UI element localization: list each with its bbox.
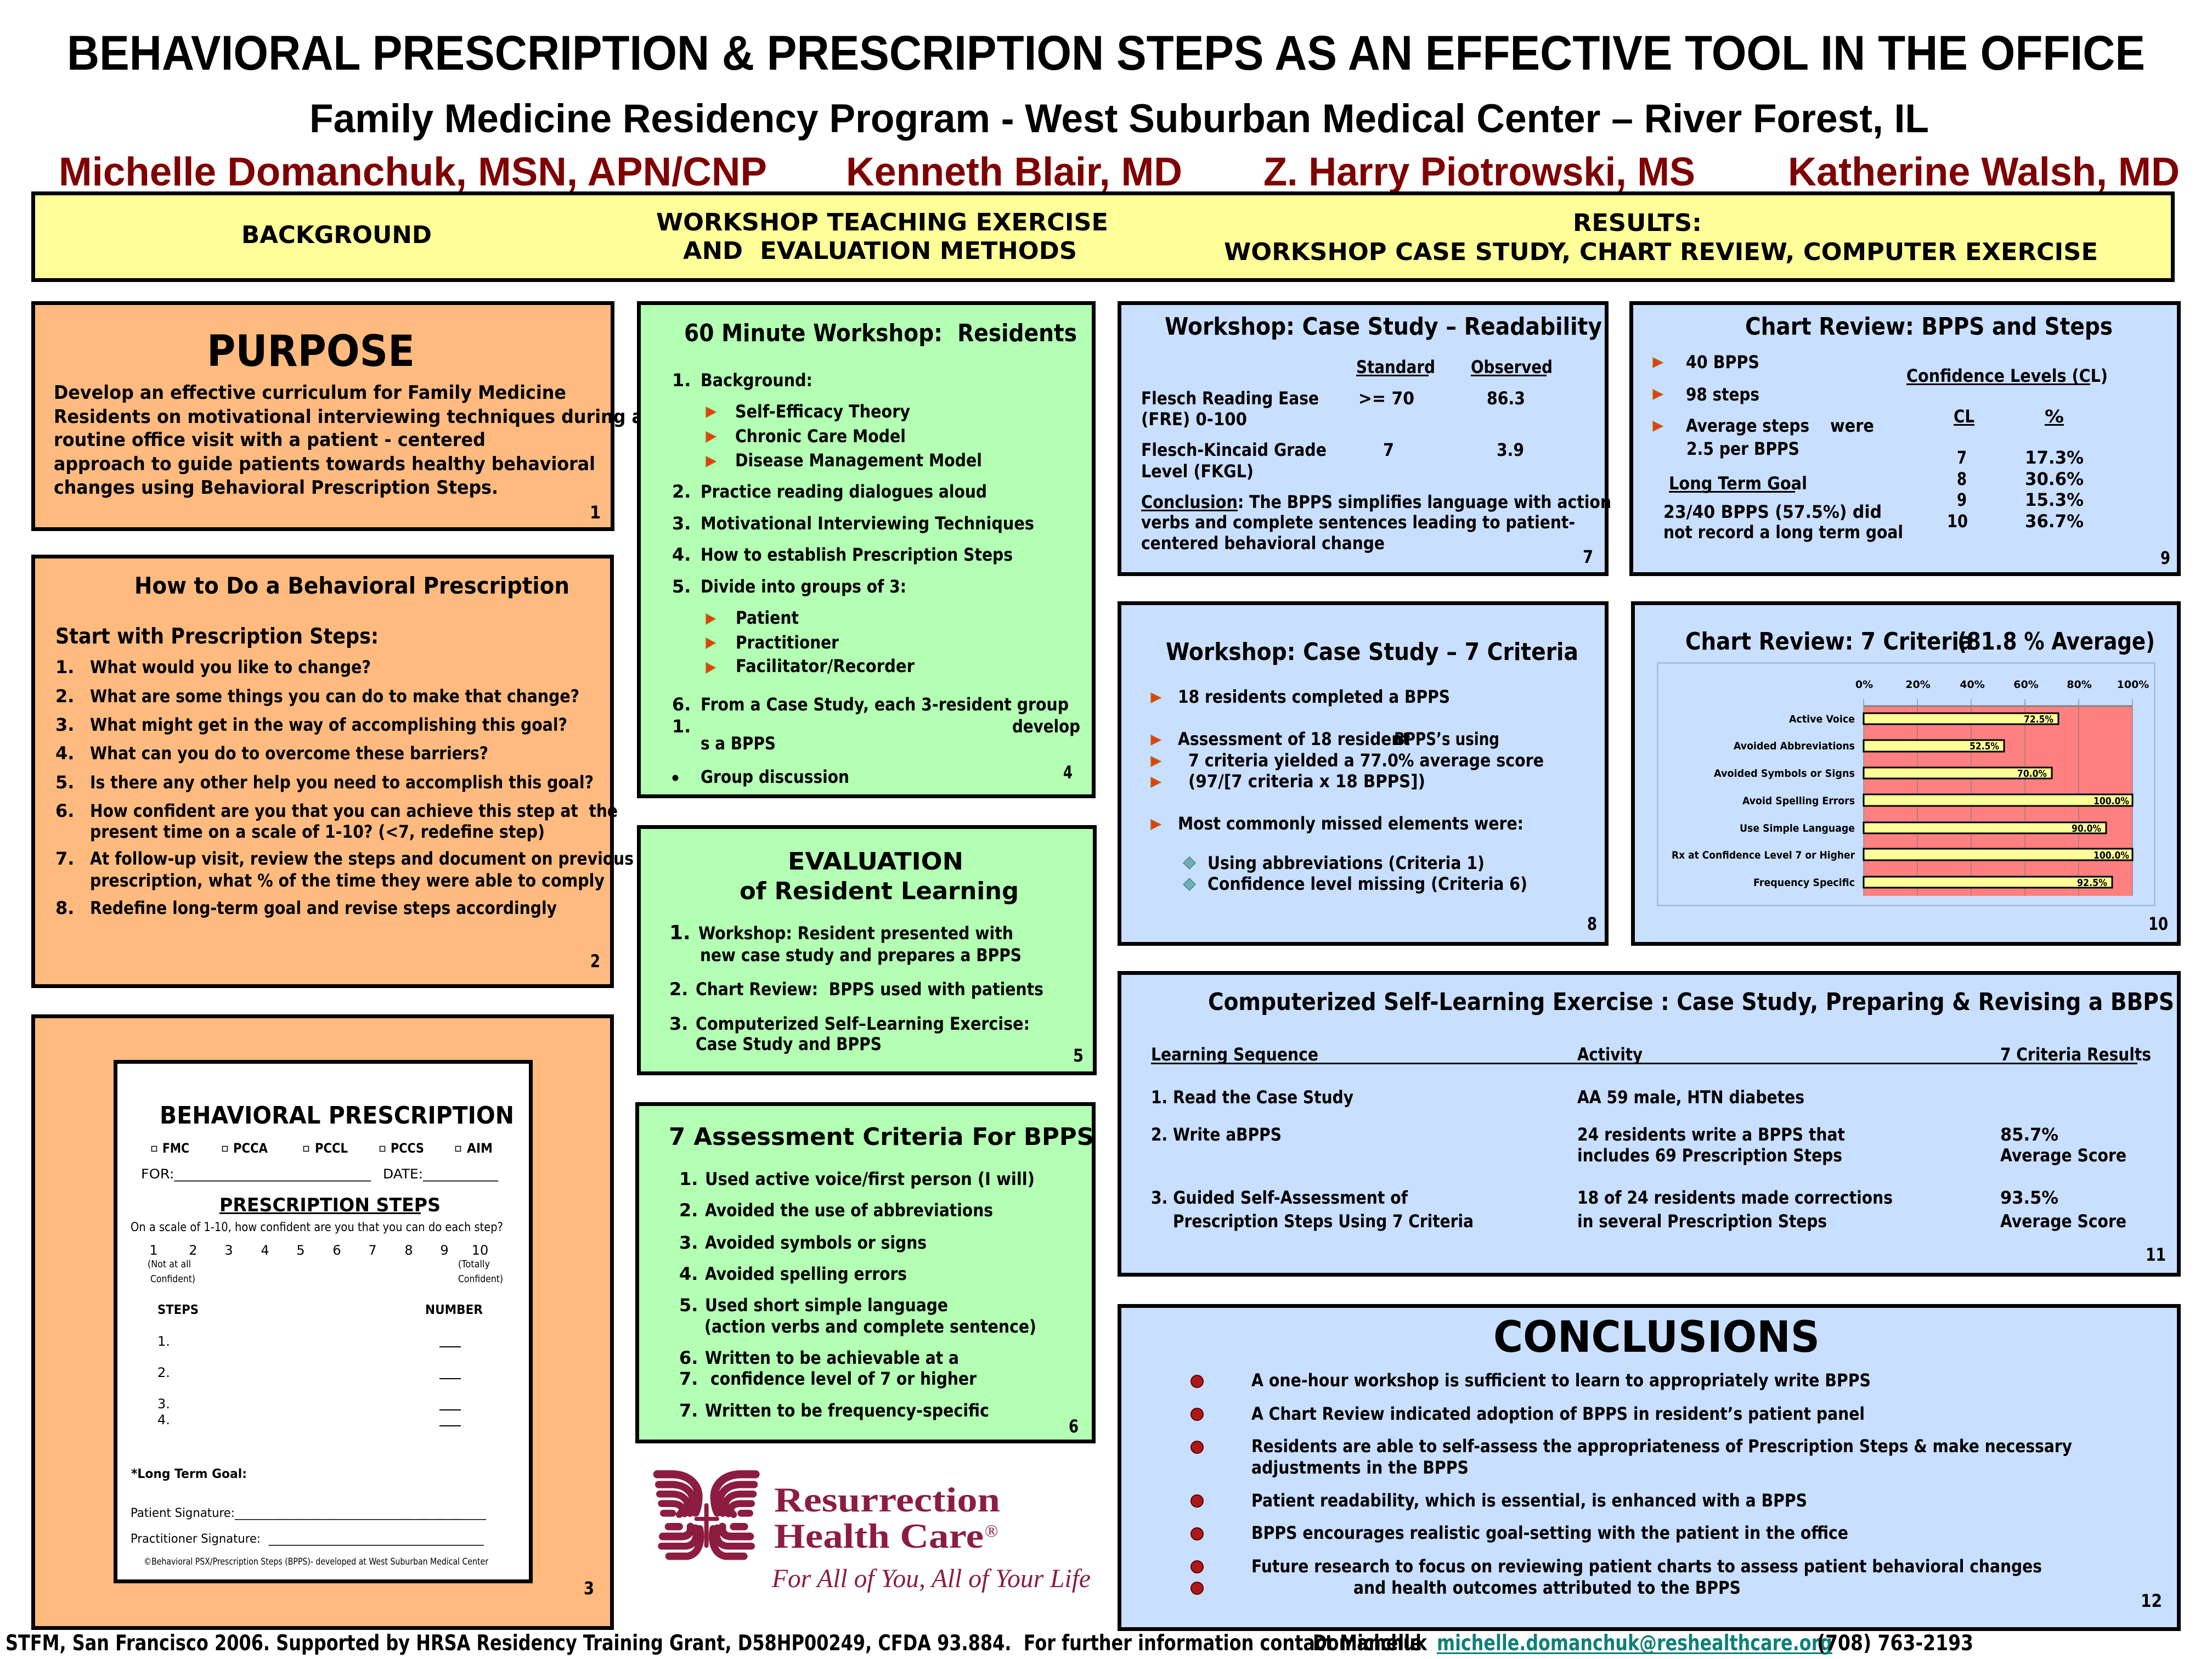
form sheet: 6	[332, 1243, 341, 1258]
criteria list	[679, 1169, 1036, 1421]
panel: case study 7 criteria	[1119, 603, 1606, 944]
evaluation list: Chart Review: BPPS used with patients	[696, 979, 1043, 1000]
readability table: Flesch Reading Ease	[1141, 388, 1319, 409]
findings list: (97/[7 criteria x 18 BPPS])	[1188, 771, 1425, 792]
form sheet: Patient Signature:	[131, 1506, 235, 1520]
form sheet: NUMBER	[425, 1303, 483, 1317]
form sheet: PCCS	[391, 1141, 424, 1156]
form sheet: ______________________________	[268, 1532, 484, 1546]
section banner	[33, 193, 2172, 280]
readability table: >= 70	[1358, 388, 1414, 409]
heading: evaluation	[740, 848, 1019, 905]
heading: chart review 7 criteria	[1685, 628, 2155, 656]
findings list: 7 criteria yielded a 77.0% average score	[1188, 750, 1544, 771]
bar chart: Frequency Specific	[1753, 877, 1855, 889]
bullet list	[1653, 352, 1874, 459]
criteria list: (action verbs and complete sentence)	[704, 1316, 1036, 1337]
authors: Z. Harry Piotrowski, MS	[1263, 150, 1695, 194]
conclusion text: : The BPPS simplifies language with action	[1238, 492, 1611, 512]
heading: purpose: PURPOSE	[207, 327, 415, 376]
form sheet: 1.	[157, 1334, 170, 1349]
authors	[59, 150, 2180, 194]
logo: Resurrection Health Care: ®	[985, 1521, 998, 1541]
bar chart: Avoided Abbreviations	[1734, 740, 1855, 752]
heading: conclusions: CONCLUSIONS	[1493, 1313, 1820, 1362]
long term goal	[1663, 473, 1903, 543]
criteria list: Used active voice/first person (I will)	[705, 1169, 1035, 1189]
criteria list: 4.	[679, 1263, 698, 1284]
evaluation list: 2.	[669, 979, 688, 1000]
self-learning table: 3. Guided Self-Assessment of	[1151, 1187, 1408, 1208]
findings list: Assessment of 18 resident	[1178, 729, 1410, 749]
form sheet: FOR:____________________________	[141, 1166, 371, 1182]
workshop list	[672, 370, 1080, 787]
form sheet: PRESCRIPTION STEPS	[219, 1194, 441, 1216]
section banner: AND EVALUATION METHODS	[683, 237, 1077, 265]
numbered step list: At follow-up visit, review the steps and document on previous	[90, 848, 634, 869]
panel: chart review 7 criteria	[1633, 603, 2179, 944]
bar chart	[1658, 663, 2155, 905]
confidence levels table: 30.6%	[2025, 469, 2084, 489]
conclusions list: A Chart Review indicated adoption of BPPS in resident’s patient panel	[1251, 1403, 1865, 1424]
long term goal: Long Term Goal	[1669, 473, 1807, 494]
logo: Resurrection Health Care: For All of You, All of Your Life	[771, 1564, 1091, 1593]
numbered step list: 3.	[55, 714, 74, 735]
self-learning table: AA 59 male, HTN diabetes	[1577, 1087, 1804, 1108]
heading: 7 criteria: Workshop: Case Study – 7 Criteria	[1166, 638, 1578, 666]
numbered step list: 5.	[55, 772, 74, 793]
numbered step list: 6.	[55, 800, 74, 821]
self-learning table: 2. Write aBPPS	[1151, 1124, 1282, 1145]
form sheet: BEHAVIORAL PRESCRIPTION	[160, 1102, 514, 1130]
self-learning table: 93.5%	[2000, 1187, 2058, 1208]
workshop list: How to establish Prescription Steps	[701, 544, 1013, 565]
conclusion text: verbs and complete sentences leading to patient-	[1141, 512, 1575, 533]
conclusions list: Residents are able to self-assess the appropriateness of Prescription Steps & make necessary	[1251, 1436, 2072, 1457]
bullet list: Average steps	[1686, 415, 1809, 436]
workshop list: 4.	[672, 544, 691, 565]
workshop list: Practitioner	[736, 632, 839, 653]
form sheet: 9	[440, 1243, 449, 1258]
footer: Domanchuk	[1313, 1631, 1427, 1656]
confidence levels table: 17.3%	[2025, 447, 2084, 468]
numbered step list	[55, 657, 634, 918]
confidence levels table: 8	[1957, 469, 1967, 489]
bar chart: 52.5%	[1970, 741, 1999, 752]
numbered step list: 2.	[55, 686, 74, 707]
evaluation list: 3.	[669, 1013, 688, 1034]
authors: Michelle Domanchuk, MSN, APN/CNP	[59, 150, 767, 194]
form sheet: Confident)	[150, 1273, 195, 1285]
conclusion text	[1141, 492, 1611, 554]
form sheet: *Long Term Goal:	[131, 1467, 247, 1481]
workshop list: 3.	[672, 513, 691, 534]
purpose text: changes using Behavioral Prescription Steps.	[54, 477, 498, 499]
evaluation list: Case Study and BPPS	[696, 1034, 882, 1054]
readability table: Level (FKGL)	[1141, 461, 1254, 482]
form sheet: DATE:___________	[383, 1166, 499, 1182]
workshop list: Motivational Interviewing Techniques	[701, 513, 1034, 534]
form sheet: ______________________________	[234, 1506, 487, 1520]
panel: case study 7 criteria: 8	[1587, 913, 1597, 934]
readability table: Flesch-Kincaid Grade	[1141, 439, 1327, 460]
authors: Kenneth Blair, MD	[846, 150, 1182, 194]
section banner: BACKGROUND	[241, 221, 432, 249]
numbered step list: How confident are you that you can achieve this step at the	[90, 800, 618, 821]
bar chart: 80%	[2067, 679, 2092, 691]
readability table: 3.9	[1497, 439, 1524, 460]
criteria list: Avoided spelling errors	[705, 1263, 907, 1284]
readability table: 86.3	[1487, 388, 1525, 409]
criteria list: 3.	[679, 1232, 698, 1253]
numbered step list: 1.	[55, 657, 74, 678]
workshop list: Divide into groups of 3:	[701, 576, 906, 597]
self-learning table: 18 of 24 residents made corrections	[1577, 1187, 1893, 1208]
self-learning table	[1151, 1044, 2151, 1232]
numbered step list: 7.	[55, 848, 74, 869]
form sheet: Confident)	[458, 1273, 503, 1285]
panel: chart review 7 criteria: 10	[2148, 913, 2168, 934]
form sheet: Practitioner Signature:	[131, 1532, 261, 1546]
confidence levels table: %	[2045, 406, 2064, 427]
confidence levels table	[1906, 365, 2108, 532]
form sheet: 10	[472, 1243, 488, 1258]
conclusions list: adjustments in the BPPS	[1251, 1457, 1469, 1478]
self-learning table: 24 residents write a BPPS that	[1577, 1124, 1845, 1145]
criteria list: Avoided the use of abbreviations	[705, 1200, 993, 1221]
evaluation list: 1.	[669, 922, 691, 944]
bar chart: Use Simple Language	[1740, 822, 1855, 834]
confidence levels table: CL	[1954, 406, 1974, 427]
conclusions list: Patient readability, which is essential, is enhanced with a BPPS	[1251, 1490, 1807, 1511]
findings list: Most commonly missed elements were:	[1178, 813, 1523, 834]
panel: evaluation of resident learning: 5	[1073, 1045, 1084, 1066]
workshop list: Chronic Care Model	[735, 426, 906, 447]
findings list	[1151, 686, 1544, 894]
evaluation list: Workshop: Resident presented with	[698, 923, 1013, 944]
panel: prescription form: 3	[584, 1578, 594, 1599]
bar chart: Avoided Symbols or Signs	[1714, 768, 1855, 780]
bar chart: 90.0%	[2072, 823, 2101, 834]
panel: 7 assessment criteria: 6	[1069, 1416, 1079, 1437]
panel: case study readability: 7	[1583, 546, 1593, 567]
bar chart: 70.0%	[2017, 768, 2047, 780]
self-learning table: in several Prescription Steps	[1577, 1211, 1827, 1232]
conclusions list: BPPS encourages realistic goal-setting with the patient in the office	[1251, 1522, 1848, 1543]
conclusion text: centered behavioral change	[1141, 533, 1385, 554]
self-learning table: Average Score	[2000, 1211, 2126, 1232]
numbered step list: What would you like to change?	[90, 657, 371, 678]
criteria list: 6.	[679, 1347, 698, 1368]
long term goal: 23/40 BPPS (57.5%) did	[1663, 501, 1882, 522]
bar chart: 100%	[2117, 679, 2149, 691]
panel: 7 assessment criteria	[637, 1104, 1094, 1442]
form sheet: (Not at all	[148, 1259, 191, 1270]
panel: chart review BPPS and steps	[1632, 303, 2179, 574]
self-learning table: Average Score	[2000, 1145, 2126, 1166]
section banner: RESULTS:	[1573, 209, 1702, 237]
form sheet: On a scale of 1-10, how confident are you that you can do each step?	[131, 1221, 503, 1234]
form sheet: 7	[368, 1243, 377, 1258]
workshop list: 1.	[672, 716, 691, 737]
self-learning table: 1. Read the Case Study	[1151, 1087, 1353, 1108]
bar chart: 72.5%	[2024, 714, 2053, 725]
heading: workshop: 60 Minute Workshop: Residents	[684, 319, 1077, 347]
bullet list: 2.5 per BPPS	[1686, 438, 1799, 459]
panel: evaluation of resident learning	[639, 827, 1095, 1073]
readability table: 7	[1383, 439, 1394, 460]
workshop list: 5.	[672, 576, 691, 597]
evaluation list: new case study and prepares a BPPS	[700, 945, 1022, 966]
criteria list: confidence level of 7 or higher	[710, 1368, 977, 1389]
numbered step list: What might get in the way of accomplishing this goal?	[90, 714, 567, 735]
heading: chart review 7 criteria: (81.8 % Average)	[1957, 628, 2155, 656]
workshop list: Background:	[701, 370, 812, 391]
form sheet: 3.	[157, 1396, 170, 1412]
bar chart: 0%	[1855, 679, 1873, 691]
criteria list: 5.	[679, 1295, 698, 1316]
purpose text: approach to guide patients towards healthy behavioral	[54, 453, 595, 475]
authors: Katherine Walsh, MD	[1788, 150, 2180, 194]
heading: chart review: Chart Review: BPPS and Steps	[1745, 313, 2113, 341]
workshop list: Disease Management Model	[735, 450, 982, 471]
logo: Resurrection Health Care	[657, 1474, 1091, 1593]
panel: prescription form	[33, 1016, 612, 1628]
conclusions list: A one-hour workshop is sufficient to learn to appropriately write BPPS	[1251, 1370, 1871, 1391]
long term goal: not record a long term goal	[1663, 522, 1903, 543]
heading: chart review 7 criteria: Chart Review: 7 Criteria	[1685, 628, 1973, 656]
form sheet: FMC	[162, 1141, 189, 1156]
workshop list: develop	[1012, 716, 1080, 737]
numbered step list: 4.	[55, 743, 74, 764]
heading: how to: How to Do a Behavioral Prescription	[134, 572, 569, 599]
form sheet: 1	[149, 1243, 158, 1258]
purpose text: Develop an effective curriculum for Family Medicine	[54, 382, 566, 404]
criteria list: 2.	[679, 1200, 698, 1221]
icon: logo emblem	[657, 1474, 755, 1556]
panel: how to do a behavioral prescription	[33, 556, 634, 986]
criteria list: Written to be frequency-specific	[705, 1400, 989, 1421]
confidence levels table: 10	[1947, 511, 1968, 532]
numbered step list: Redefine long-term goal and revise steps accordingly	[90, 898, 557, 918]
self-learning table: 7 Criteria Results	[2000, 1044, 2151, 1065]
panel: conclusions: 12	[2141, 1590, 2162, 1611]
self-learning table: includes 69 Prescription Steps	[1577, 1145, 1842, 1166]
conclusions list	[1191, 1370, 2072, 1598]
conclusions list: Future research to focus on reviewing patient charts to assess patient behavioral changes	[1251, 1556, 2042, 1577]
panel: 60 minute workshop: 4	[1063, 762, 1073, 783]
form sheet: 4.	[157, 1412, 170, 1427]
conclusions list: and health outcomes attributed to the BPPS	[1353, 1577, 1741, 1598]
form sheet: ©Behavioral PSX/Prescription Steps (BPPS)- developed at West Suburban Medical Center	[144, 1556, 488, 1567]
findings list: 18 residents completed a BPPS	[1178, 686, 1450, 707]
bar chart: 60%	[2013, 679, 2039, 691]
bar chart: 20%	[1905, 679, 1931, 691]
bar chart: Avoid Spelling Errors	[1742, 795, 1855, 807]
subheading: start with steps: Start with Prescription Steps:	[55, 624, 379, 649]
panel: computerized self-learning exercise: 11	[2146, 1244, 2166, 1265]
readability table: Observed	[1471, 357, 1553, 377]
form sheet: 5	[296, 1243, 305, 1258]
confidence levels table: 15.3%	[2025, 489, 2084, 510]
form sheet: 2	[189, 1243, 198, 1258]
readability table: Standard	[1356, 357, 1435, 377]
criteria list: Used short simple language	[705, 1295, 948, 1316]
purpose text	[54, 382, 644, 499]
purpose text: Residents on motivational interviewing techniques during a	[54, 406, 644, 428]
workshop list: s a BPPS	[701, 733, 776, 754]
criteria list: 7.	[679, 1368, 698, 1389]
bullet list: 40 BPPS	[1686, 352, 1759, 373]
workshop list: 1.	[672, 370, 691, 391]
bar chart: Rx at Confidence Level 7 or Higher	[1672, 849, 1855, 861]
criteria list: Written to be achievable at a	[705, 1347, 959, 1368]
workshop list: From a Case Study, each 3-resident group	[701, 694, 1069, 715]
bar chart: 40%	[1960, 679, 1985, 691]
workshop list: Practice reading dialogues aloud	[701, 481, 987, 502]
confidence levels table: 7	[1957, 447, 1967, 468]
form sheet: 2.	[157, 1365, 170, 1380]
bullet list: were	[1830, 415, 1874, 436]
panel: 60 minute workshop	[639, 303, 1094, 797]
heading: evaluation: of Resident Learning	[740, 877, 1019, 905]
subtitle: Family Medicine Residency Program - West Suburban Medical Center – River Forest, IL	[309, 97, 1929, 141]
heading: readability: Workshop: Case Study – Readability	[1165, 313, 1602, 341]
panel: chart review BPPS and steps: 9	[2160, 548, 2170, 568]
footer: STFM, San Francisco 2006. Supported by HRSA Residency Training Grant, D58HP00249, CFDA 93.884. For further information contact Michelle	[5, 1631, 1422, 1656]
bar chart: Active Voice	[1789, 713, 1855, 725]
confidence levels table: 36.7%	[2025, 511, 2084, 532]
self-learning table: 85.7%	[2000, 1124, 2058, 1145]
numbered step list: What can you do to overcome these barriers?	[90, 743, 488, 764]
footer: michelle.domanchuk@reshealthcare.org	[1437, 1631, 1832, 1656]
numbered step list: Is there any other help you need to accomplish this goal?	[90, 772, 594, 793]
form sheet: 4	[261, 1243, 269, 1258]
form sheet: STEPS	[157, 1303, 199, 1317]
panel: conclusions	[1119, 1306, 2179, 1629]
workshop list: Patient	[736, 607, 799, 628]
self-learning table: Activity	[1577, 1044, 1643, 1065]
form sheet: 3	[224, 1243, 233, 1258]
workshop list: Group discussion	[701, 766, 849, 787]
readability table	[1141, 357, 1553, 482]
findings list: BPPS’s using	[1394, 729, 1499, 749]
bar chart: 100.0%	[2094, 795, 2129, 807]
confidence levels table: Confidence Levels (CL)	[1906, 365, 2108, 386]
form sheet: 8	[404, 1243, 413, 1258]
bullet list: 98 steps	[1686, 384, 1759, 405]
workshop list: Facilitator/Recorder	[736, 656, 915, 676]
panel: computerized self-learning exercise	[1119, 973, 2179, 1275]
criteria list: 1.	[679, 1169, 698, 1189]
heading: assessment criteria: 7 Assessment Criteria For BPPS	[669, 1123, 1094, 1151]
confidence levels table: 9	[1957, 489, 1967, 510]
purpose text: routine office visit with a patient - centered	[54, 429, 486, 451]
self-learning table: Prescription Steps Using 7 Criteria	[1173, 1211, 1474, 1232]
panel: how to do a behavioral prescription: 2	[590, 951, 600, 972]
conclusion text: Conclusion	[1141, 492, 1238, 512]
heading: evaluation: EVALUATION	[788, 848, 963, 876]
logo: Resurrection Health Care: Resurrection	[774, 1480, 1000, 1519]
numbered step list: prescription, what % of the time they were able to comply	[90, 870, 605, 891]
criteria list: 7.	[679, 1400, 698, 1421]
form sheet: PCCA	[233, 1141, 268, 1156]
panel: purpose	[33, 303, 644, 529]
section banner: WORKSHOP CASE STUDY, CHART REVIEW, COMPUTER EXERCISE	[1224, 238, 2098, 266]
footer: (708) 763-2193	[1817, 1631, 1973, 1656]
criteria list: Avoided symbols or signs	[705, 1232, 927, 1253]
form sheet: (Totally	[458, 1259, 490, 1270]
form sheet: AIM	[467, 1141, 493, 1156]
findings list: Confidence level missing (Criteria 6)	[1207, 873, 1527, 894]
workshop list: 2.	[672, 481, 691, 502]
bar chart: 100.0%	[2094, 850, 2129, 861]
evaluation list: Computerized Self–Learning Exercise:	[696, 1013, 1030, 1034]
workshop list: Self-Efficacy Theory	[735, 401, 910, 422]
numbered step list: present time on a scale of 1-10? (<7, redefine step)	[90, 821, 545, 842]
section banner: WORKSHOP TEACHING EXERCISE	[656, 208, 1108, 236]
numbered step list: What are some things you can do to make that change?	[90, 686, 579, 707]
workshop list: 6.	[672, 694, 691, 715]
numbered step list: 8.	[55, 898, 74, 918]
form sheet	[115, 1062, 531, 1581]
form sheet: PCCL	[315, 1141, 348, 1156]
bar chart: 92.5%	[2077, 877, 2107, 889]
findings list: Using abbreviations (Criteria 1)	[1207, 853, 1485, 873]
evaluation list	[669, 922, 1043, 1054]
panel: purpose: 1	[590, 502, 601, 523]
readability table: (FRE) 0-100	[1141, 409, 1247, 430]
panel: case study readability	[1119, 303, 1611, 574]
logo: Resurrection Health Care: Health Care	[774, 1516, 984, 1555]
self-learning table: Learning Sequence	[1151, 1044, 1318, 1065]
